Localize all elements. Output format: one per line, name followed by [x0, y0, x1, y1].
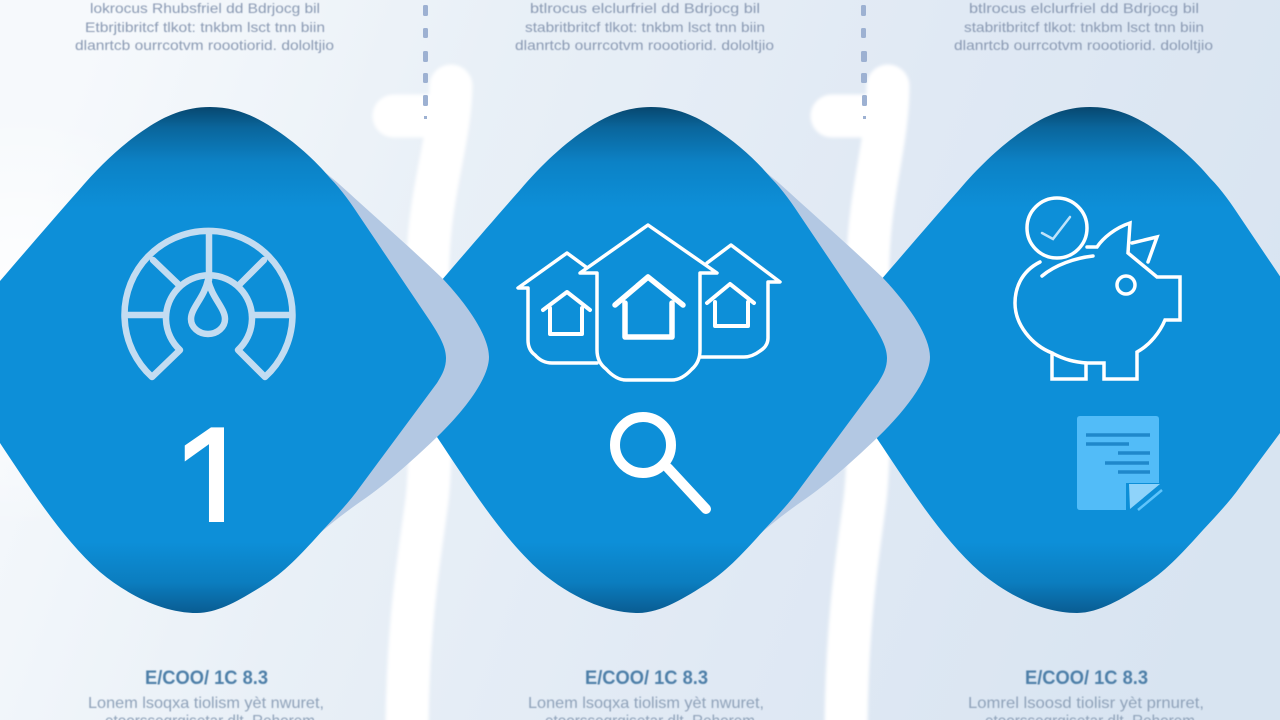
- caption: column 3: [968, 668, 1204, 720]
- divider: left dashed line: [423, 5, 428, 119]
- caption: column 1: Lonem lsoqxa tiolism yèt nwuret,: [88, 695, 324, 712]
- text block: top column 2: stabritbritcf tlkot: tnkbm lsct tnn biin: [525, 19, 765, 35]
- caption: column 2: Lonem lsoqxa tiolism yèt nwuret,: [528, 695, 764, 712]
- text block: top column 1: lokrocus Rhubsfriel dd Bdrjocg bil: [90, 0, 320, 16]
- text block: top column 1: [75, 0, 334, 53]
- text block: top column 2: btlrocus elclurfriel dd Bdrjocg bil: [530, 0, 760, 16]
- ribbon: left white curve: [394, 86, 451, 720]
- shadow: second diamond fold: [651, 170, 930, 542]
- caption: column 2: [528, 668, 764, 720]
- caption: column 1: E/COO/ 1C 8.3: [145, 668, 268, 689]
- text block: top column 3: stabritbritcf tlkot: tnkbm lsct tnn biin: [964, 19, 1204, 35]
- number 1: 1: [171, 396, 258, 570]
- text block: top column 3: [954, 0, 1213, 53]
- panel: first diamond: [0, 107, 446, 613]
- icon: three houses: [518, 225, 780, 380]
- text block: top column 1: Etbrjtibritcf tlkot: tnkbm lsct tnn biin: [85, 19, 325, 35]
- icon: magnifying glass: [615, 417, 706, 509]
- divider: right dashed line: [861, 5, 867, 119]
- caption: column 1: [88, 668, 324, 720]
- caption: column 3: Lomrel lsoosd tiolisr yèt prnuret,: [968, 695, 1204, 712]
- text block: top column 3: dlanrtcb ourrcotvm roootiorid. dololtjio: [954, 37, 1213, 53]
- text block: top column 1: dlanrtcb ourrcotvm roootiorid. dololtjio: [75, 37, 334, 53]
- text block: top column 2: [515, 0, 774, 53]
- caption: column 2: E/COO/ 1C 8.3: [585, 668, 708, 689]
- panel: second diamond: [407, 107, 887, 613]
- text block: top column 2: dlanrtcb ourrcotvm roootiorid. dololtjio: [515, 37, 774, 53]
- icon: piggy bank with coin: [1015, 198, 1180, 379]
- caption: column 3: E/COO/ 1C 8.3: [1025, 668, 1148, 689]
- shadow: first diamond fold: [210, 170, 489, 542]
- ribbon: right white curve: [832, 86, 888, 720]
- icon: speedometer gauge: [125, 231, 293, 377]
- icon: document with pen: [1077, 416, 1162, 510]
- panel: third diamond: [846, 107, 1280, 613]
- text block: top column 3: btlrocus elclurfriel dd Bdrjocg bil: [969, 0, 1199, 16]
